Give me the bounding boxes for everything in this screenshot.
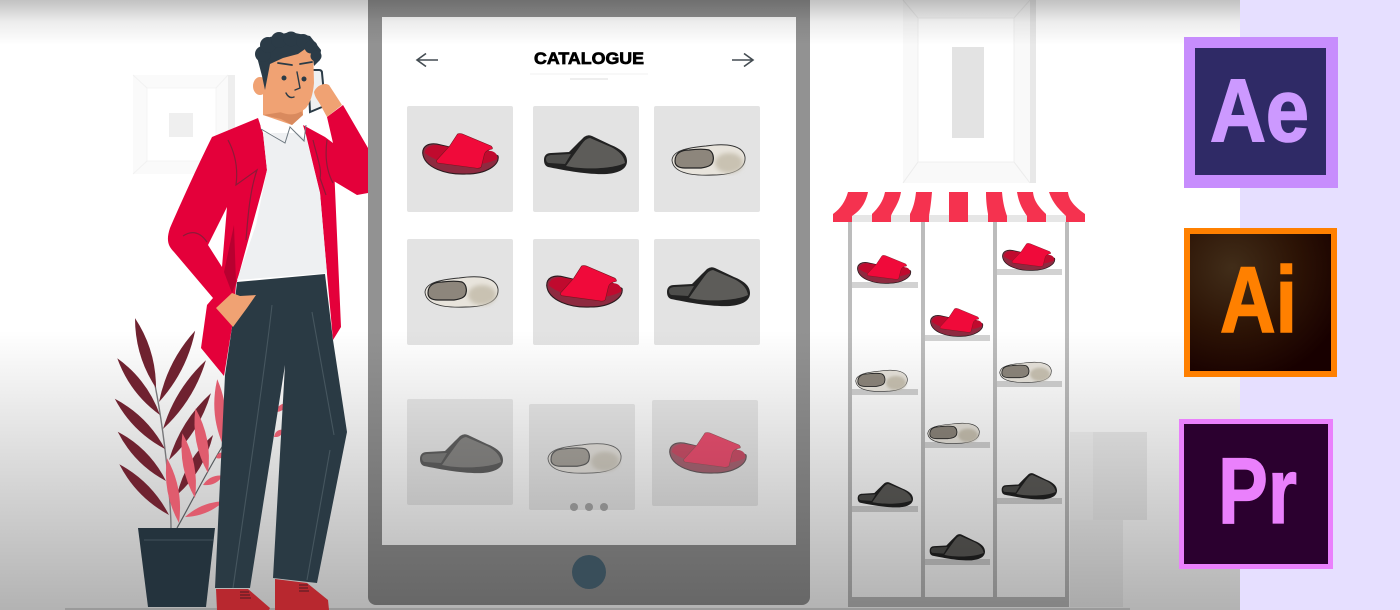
- catalogue heading: CATALOGUE: [534, 49, 644, 68]
- icon: After Effects: [1184, 37, 1338, 188]
- lilac side panel: [1240, 0, 1400, 610]
- plant pot: [138, 528, 215, 607]
- hand at phone: [314, 84, 342, 117]
- icon: Illustrator: Ai: [1220, 247, 1297, 352]
- tablet: [368, 0, 810, 605]
- icon: Illustrator: [1184, 228, 1337, 377]
- shirt: [237, 115, 327, 280]
- icon: Premiere Pro: [1179, 419, 1333, 569]
- trousers: [215, 274, 347, 588]
- shop shelf: [848, 218, 1069, 607]
- icon: After Effects: Ae: [1210, 60, 1309, 160]
- floor line: [65, 608, 1130, 610]
- pagination dots: [570, 503, 608, 511]
- hand in pocket: [216, 293, 256, 327]
- catalogue heading: [530, 49, 648, 79]
- tablet screen: [382, 17, 796, 545]
- jacket: [168, 105, 368, 376]
- hair: [255, 32, 322, 90]
- wall frame: right: [903, 0, 1036, 183]
- catalogue slippers: [420, 134, 750, 473]
- shelf slippers: [856, 243, 1057, 560]
- potted plant: [111, 316, 290, 607]
- arrow: next: [732, 54, 753, 66]
- awning: [833, 192, 1085, 222]
- neck and face: [253, 45, 314, 125]
- man on phone: [168, 32, 368, 610]
- catalogue card grid: [407, 106, 760, 510]
- icon: Premiere Pro: Pr: [1218, 438, 1297, 543]
- facial features: [278, 62, 312, 98]
- boots: [216, 579, 329, 610]
- phone: [308, 70, 325, 112]
- wall frame: left: [133, 75, 235, 174]
- arrow: previous: [417, 54, 438, 66]
- background blocks: [1070, 432, 1147, 607]
- tablet home button: [572, 555, 606, 589]
